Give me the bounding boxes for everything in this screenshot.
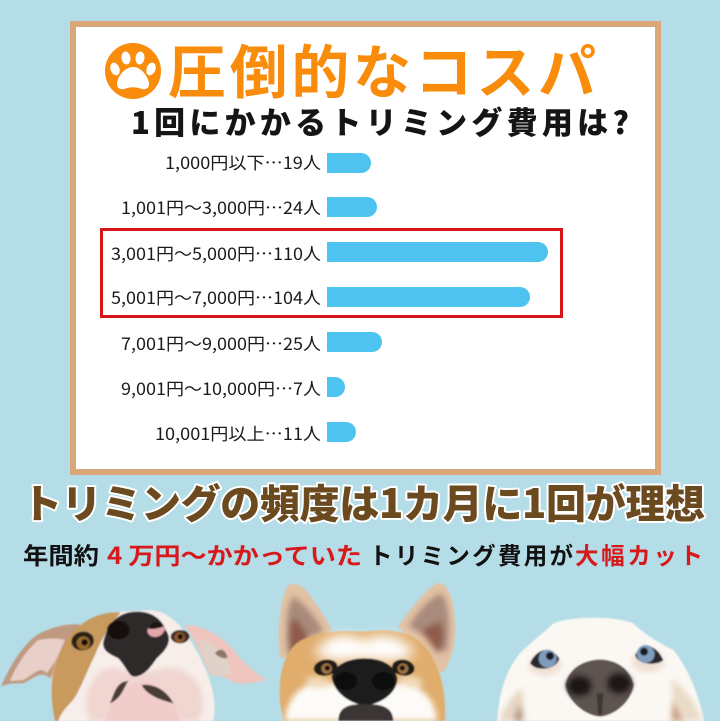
right ear <box>398 583 455 673</box>
ear shading <box>500 651 702 721</box>
row: 1,000 yen or less: 1,000円以下…19人 <box>165 149 321 174</box>
row: 5,001 to 7,000 yen: 5,001円〜7,000円…104人 <box>111 284 321 309</box>
subtitle: 1回にかかるトリミング費用は? <box>131 98 629 143</box>
row: 7,001 to 9,000 yen: 7,001円〜9,000円…25人 <box>121 330 321 355</box>
muzzle pink <box>86 668 203 721</box>
white face <box>315 635 415 661</box>
mouth dark marks <box>110 681 128 703</box>
subheading: 大幅カット <box>575 537 703 571</box>
tan patch <box>52 612 121 721</box>
subheading: 年間約 <box>23 537 99 571</box>
eyes <box>530 650 559 669</box>
row: 1,001 to 3,000 yen: 1,001円〜3,000円…24人 <box>121 194 321 219</box>
photo: white retriever looking up <box>497 618 704 721</box>
row: 9,001 to 10,000 yen: 9,001円〜10,000円…7人 <box>121 375 321 400</box>
headline: トリミングの頻度は1カ月に1回が理想 <box>22 472 705 530</box>
nose <box>565 659 634 717</box>
mouth <box>338 704 393 721</box>
subheading <box>23 537 703 571</box>
head <box>280 630 445 721</box>
nose <box>332 658 397 706</box>
eyes <box>70 630 95 652</box>
panel: survey frame <box>73 24 658 472</box>
icon: paw in orange circle <box>105 43 161 99</box>
subheading: 4 万円〜かかっていた <box>107 537 362 571</box>
callout: red highlight box <box>102 230 562 316</box>
bar chart <box>111 149 548 445</box>
right ear <box>185 625 266 684</box>
title: 圧倒的なコスパ <box>168 26 596 110</box>
row: 5,001 to 7,000 yen <box>111 284 530 309</box>
row: 3,001 to 5,000 yen: 3,001円〜5,000円…110人 <box>111 240 321 265</box>
subheading: トリミング費用が <box>369 537 574 571</box>
nose and black patch <box>103 612 169 677</box>
eye surrounds <box>528 654 562 676</box>
head <box>497 618 704 721</box>
head <box>51 610 215 721</box>
eyes <box>312 658 339 678</box>
photo: shiba looking up <box>279 583 455 721</box>
left ear <box>1 624 80 687</box>
left ear <box>279 584 332 658</box>
row: 3,001 to 5,000 yen <box>111 240 548 265</box>
photo: bulldog looking up <box>1 610 266 721</box>
row: 10,001 yen or more: 10,001円以上…11人 <box>155 420 321 445</box>
